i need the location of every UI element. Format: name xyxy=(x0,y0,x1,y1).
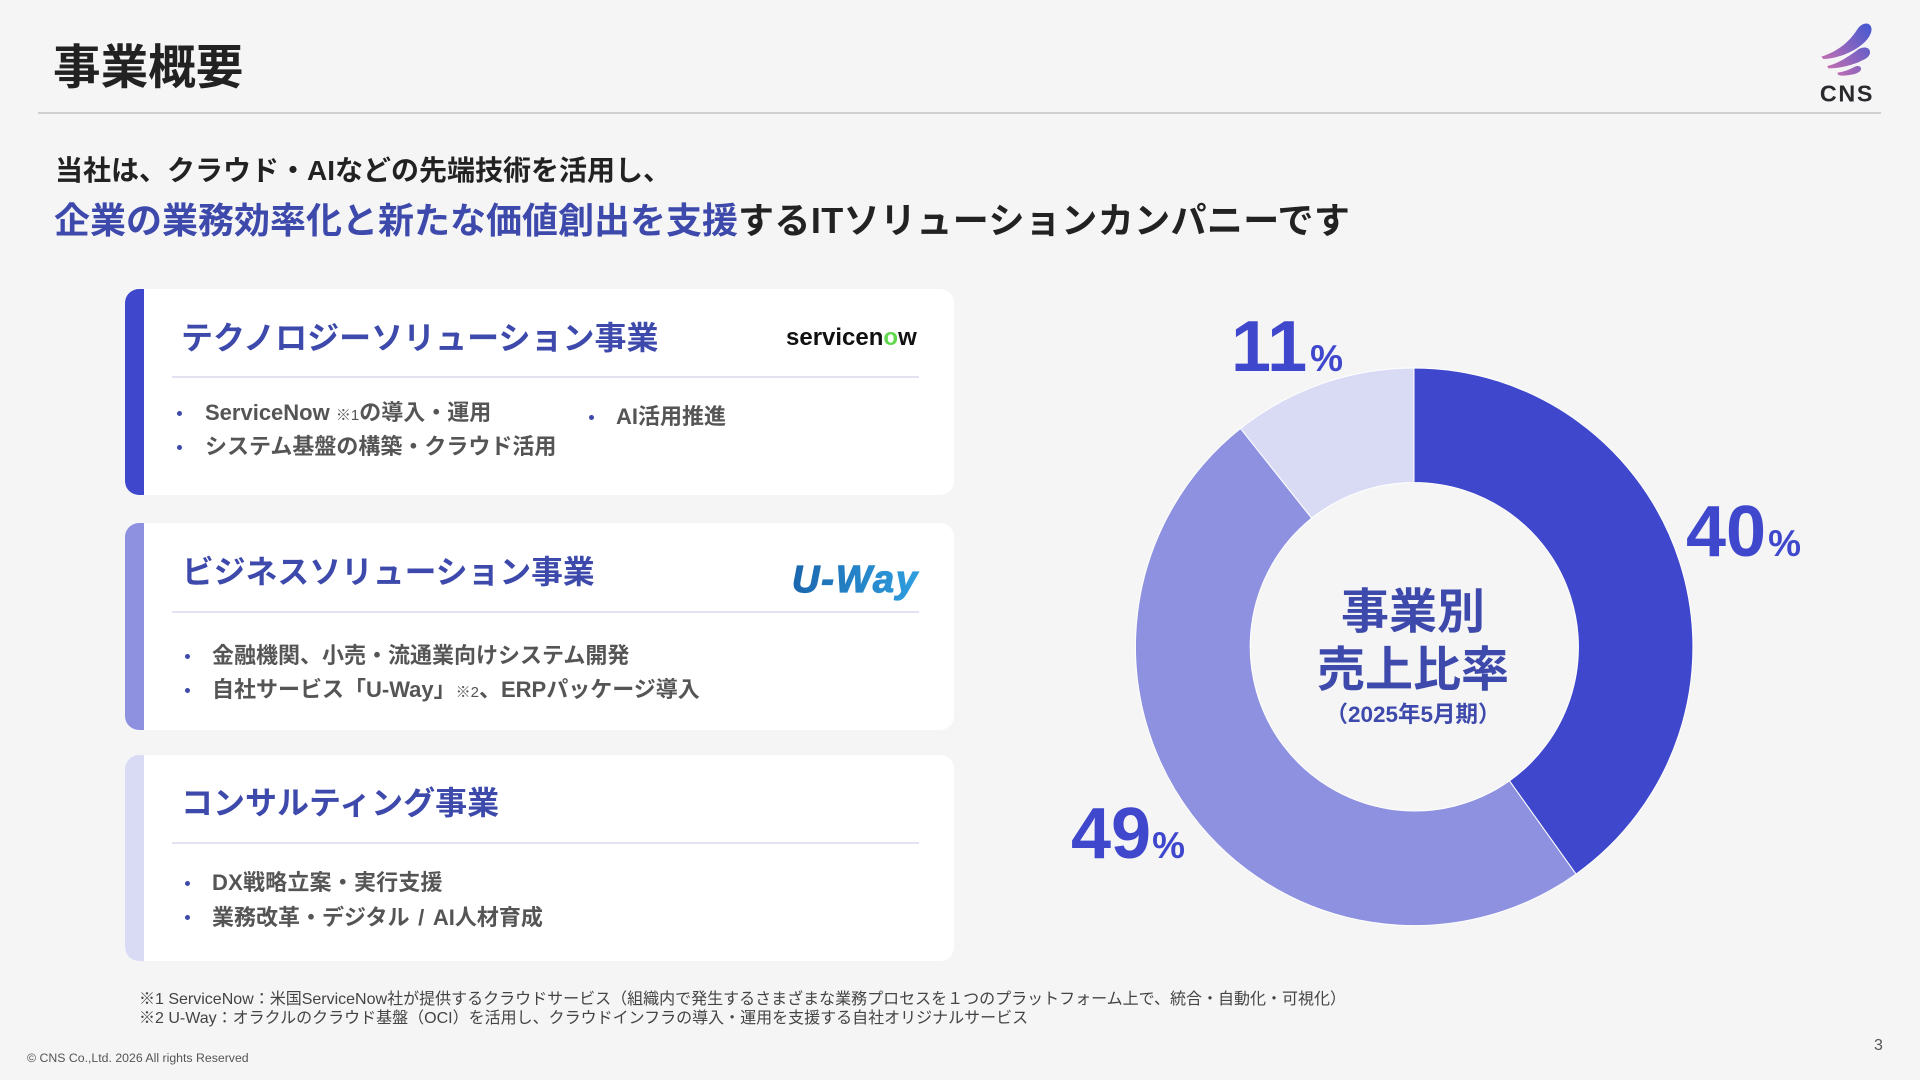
center label xyxy=(1317,586,1509,727)
panel: business solutions xyxy=(125,523,954,730)
lead text line 2: 企業の業務効率化と新たな価値創出を支援するITソリューションカンパニーです xyxy=(54,200,1350,241)
footnotes: ※2 U-Way：オラクルのクラウド基盤（OCI）を活用し、クラウドインフラの導入・運用を支援する自社オリジナルサービス xyxy=(139,1010,1028,1027)
footnotes: ※1 ServiceNow：米国ServiceNow社が提供するクラウドサービス（組織内で発生するさまざまな業務プロセスを１つのプラットフォーム上で、統合・自動化・可視化） xyxy=(139,991,1346,1008)
title rule xyxy=(38,112,1881,114)
logo: CNS xyxy=(1820,24,1874,107)
footnotes xyxy=(139,990,1346,1027)
label: 40%: 40% xyxy=(1686,492,1801,572)
center label: 事業別 xyxy=(1341,586,1485,639)
page number: 3 xyxy=(1874,1037,1883,1054)
bullet: AI: AI活用推進 xyxy=(616,404,726,429)
center label: （2025年5月期） xyxy=(1325,702,1501,727)
segment: 40% xyxy=(1414,368,1693,874)
heading: technology solutions: テクノロジーソリューション事業 xyxy=(181,320,658,356)
logo: CNS: CNS xyxy=(1820,81,1874,107)
logo: servicenow: servicenow xyxy=(786,324,917,351)
bullet: finance: 金融機関、小売・流通業向けシステム開発 xyxy=(212,643,629,668)
heading: business solutions: ビジネスソリューション事業 xyxy=(182,554,595,590)
bullet: system: システム基盤の構築・クラウド活用 xyxy=(205,434,556,459)
panel: consulting xyxy=(125,755,954,961)
label: 49%: 49% xyxy=(1071,794,1185,874)
logo: U-Way: U-Way xyxy=(792,559,919,601)
panel: technology solutions xyxy=(125,289,954,495)
copyright: © CNS Co.,Ltd. 2026 All rights Reserved xyxy=(27,1051,249,1065)
center label: 売上比率 xyxy=(1317,644,1509,697)
donut chart xyxy=(1135,368,1694,926)
bullet: reform: 業務改革・デジタル / AI人材育成 xyxy=(212,905,543,930)
bullet: DX: DX戦略立案・実行支援 xyxy=(212,870,443,895)
title: 事業概要 xyxy=(53,42,243,95)
lead text line 1: 当社は、クラウド・AIなどの先端技術を活用し、 xyxy=(55,155,671,186)
label: 11%: 11% xyxy=(1231,307,1343,387)
segment: 49% xyxy=(1135,428,1576,926)
heading: consulting: コンサルティング事業 xyxy=(181,785,499,821)
segment: 11% xyxy=(1240,368,1414,518)
bullet: ServiceNow: ServiceNow ※1の導入・運用 xyxy=(205,400,491,425)
bullet: U-Way: 自社サービス「U-Way」※2、ERPパッケージ導入 xyxy=(212,677,700,702)
